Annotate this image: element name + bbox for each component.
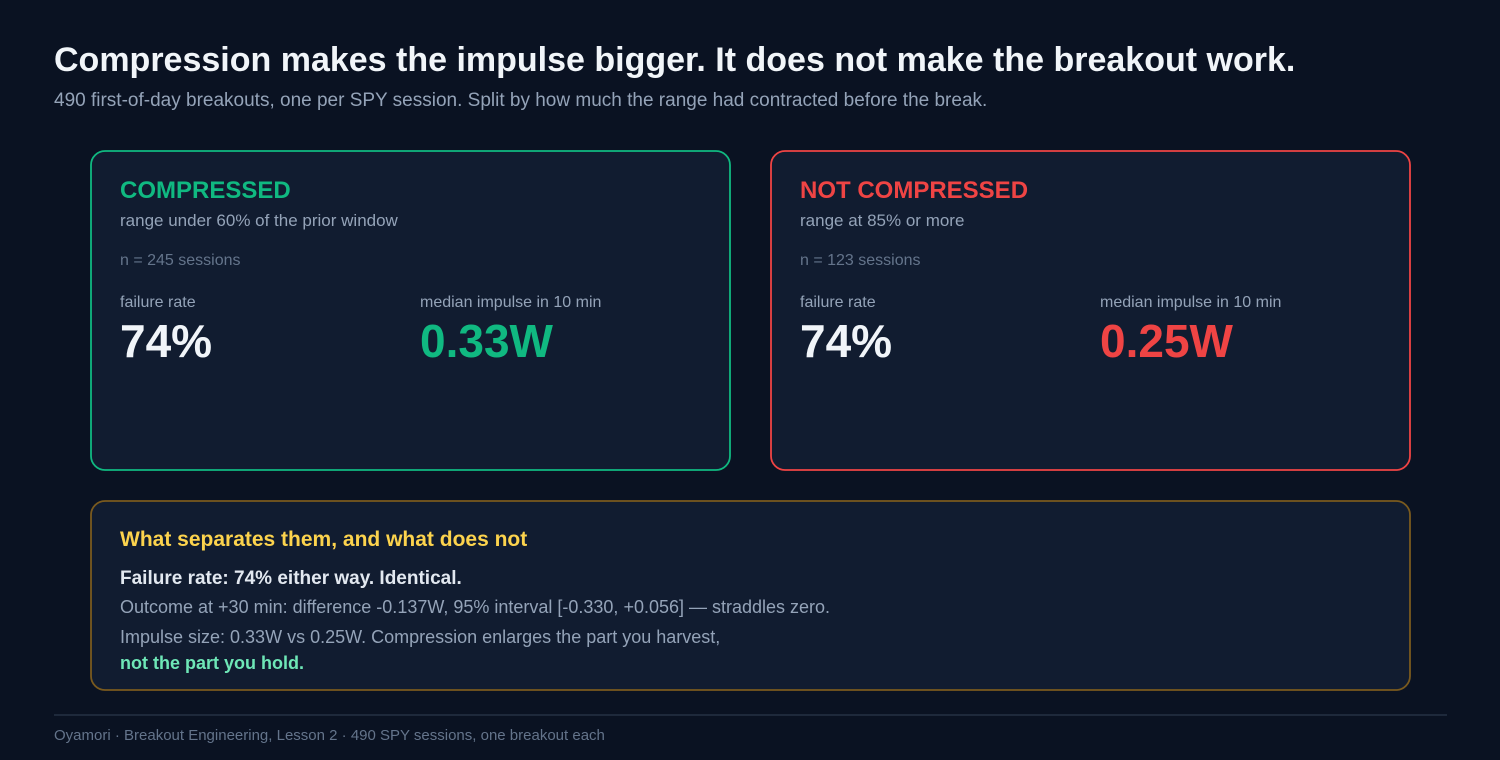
title: Compression makes the impulse bigger. It does not make the breakout work. <box>54 41 1295 79</box>
panel description: compressed: range under 60% of the prior window <box>120 211 398 230</box>
callout heading: What separates them, and what does not <box>120 528 527 551</box>
panel: what separates them <box>90 500 1411 691</box>
panel: compressed <box>90 150 731 471</box>
metric: median impulse, compressed: median impulse in 10 min <box>420 294 601 311</box>
conclusion: not the part you hold. <box>120 653 304 673</box>
metric: median impulse, not compressed <box>1100 294 1281 367</box>
metric: median impulse, not compressed: 0.25W <box>1100 315 1233 367</box>
footer: Oyamori · Breakout Engineering, Lesson 2 · 490 SPY sessions, one breakout each <box>54 727 605 744</box>
panel heading: not compressed: NOT COMPRESSED <box>800 177 1028 204</box>
panel: not compressed <box>770 150 1411 471</box>
metric: failure rate, not compressed: failure rate <box>800 294 876 311</box>
metric: median impulse, compressed: 0.33W <box>420 315 553 367</box>
metric: median impulse, compressed <box>420 294 601 367</box>
panel heading: compressed: COMPRESSED <box>120 177 291 204</box>
metric: failure rate, compressed: 74% <box>120 315 212 367</box>
subtitle: 490 first-of-day breakouts, one per SPY session. Split by how much the range had contracted before the break. <box>54 90 987 111</box>
impulse statement: Impulse size: 0.33W vs 0.25W. Compression enlarges the part you harvest, <box>120 627 720 647</box>
metric: failure rate, compressed: failure rate <box>120 294 196 311</box>
outcome statement: Outcome at +30 min: difference -0.137W, 95% interval [-0.330, +0.056] — straddles zero. <box>120 597 830 617</box>
sample size: compressed: n = 245 sessions <box>120 252 241 269</box>
metric: median impulse, not compressed: median impulse in 10 min <box>1100 294 1281 311</box>
failure rate statement: Failure rate: 74% either way. Identical. <box>120 568 462 589</box>
panel description: not compressed: range at 85% or more <box>800 211 964 230</box>
metric: failure rate, not compressed: 74% <box>800 315 892 367</box>
sample size: not compressed: n = 123 sessions <box>800 252 921 269</box>
